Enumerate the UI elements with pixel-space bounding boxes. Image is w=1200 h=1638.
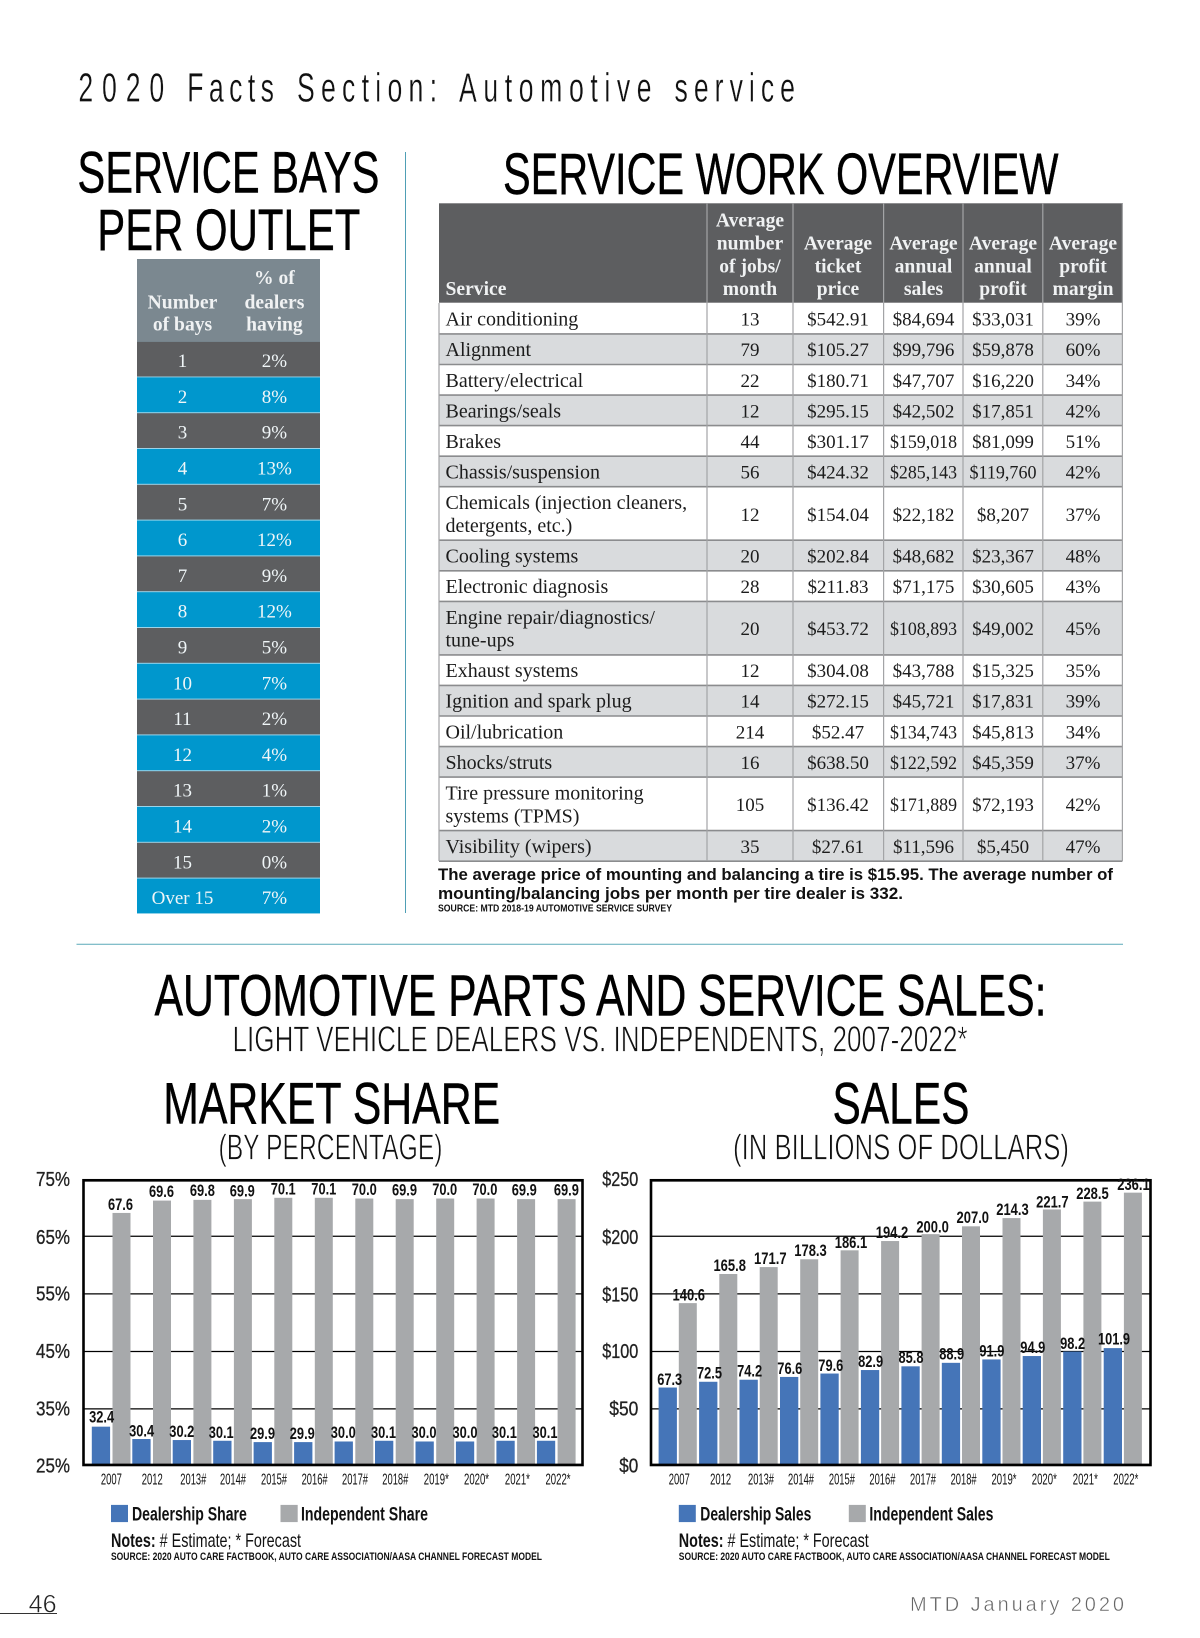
legend: Dealership Share [132, 1503, 247, 1524]
footer: publication and date: MTD January 2020 [910, 1594, 1124, 1616]
y axis labels: $150 [602, 1284, 638, 1307]
value labels: independent sales: 228.5 [1076, 1184, 1109, 1203]
table rows: $43,788 [893, 661, 954, 682]
value labels: independent sales [673, 1175, 1150, 1305]
table rows: Chemicals (injection cleaners, [446, 492, 687, 514]
table rows: 105 [736, 795, 764, 816]
table rows: Exhaust systems [446, 660, 578, 682]
legend: Dealership Sales [700, 1503, 811, 1524]
table header: number [717, 233, 783, 254]
value labels: dealership sales: 94.9 [1020, 1338, 1045, 1357]
table rows: 4 [178, 458, 188, 480]
table rows: $27.61 [812, 837, 864, 858]
table rows: 10 [173, 673, 192, 694]
table rows: $72,193 [972, 795, 1034, 816]
table rows: 28 [740, 577, 760, 598]
table rows: 12 [740, 401, 760, 422]
table rows: 6 [178, 530, 187, 551]
value labels: dealership share: 30.0 [453, 1423, 478, 1442]
table rows: $71,175 [893, 577, 954, 598]
table rows: 22 [740, 371, 760, 392]
table rows: $99,796 [893, 340, 954, 361]
table rows: 13 [173, 781, 192, 802]
panel: service work table [439, 203, 1122, 861]
legend: Independent Sales [869, 1503, 993, 1524]
table rows: $84,694 [893, 310, 955, 331]
table rows: Shocks/struts [446, 752, 552, 774]
table rows: Engine repair/diagnostics/ [446, 607, 655, 629]
table header: Average [889, 233, 958, 254]
value labels: dealership sales: 67.3 [657, 1370, 682, 1389]
table rows: $47,707 [893, 371, 954, 392]
table header [137, 259, 320, 342]
value labels: independent sales: 194.2 [876, 1223, 908, 1242]
value labels: independent sales: 140.6 [673, 1285, 705, 1305]
x axis labels: 2018# [382, 1471, 409, 1488]
table header: price [817, 279, 860, 300]
table rows: Cooling systems [446, 546, 579, 568]
value labels: dealership sales: 91.9 [979, 1341, 1004, 1360]
table rows: Electronic diagnosis [446, 576, 608, 598]
table rows: 12 [740, 505, 760, 526]
table rows: Brakes [446, 431, 501, 453]
table rows: $285,143 [890, 462, 957, 484]
table rows: 56 [740, 462, 760, 484]
x axis labels: 2016# [302, 1471, 328, 1488]
heading: service bays per outlet: PER OUTLET [97, 198, 360, 263]
y axis labels: $200 [602, 1227, 638, 1249]
table rows: $159,018 [890, 432, 957, 453]
bars: independent share [112, 1198, 576, 1464]
legend [111, 1503, 428, 1524]
table rows: Battery/electrical [446, 370, 584, 392]
table rows: Alignment [446, 339, 531, 361]
x axis labels [669, 1471, 1138, 1488]
y axis labels: 35% [36, 1399, 70, 1421]
value labels: independent share [108, 1179, 579, 1214]
bars: independent sales [679, 1193, 1142, 1464]
page number: 46 [29, 1590, 57, 1618]
value labels: independent share: 70.0 [352, 1180, 377, 1199]
table rows: $11,596 [893, 837, 954, 858]
table rows: $15,325 [972, 661, 1034, 682]
table header: margin [1053, 279, 1114, 300]
table rows: $45,813 [972, 722, 1034, 743]
table rows: Ignition and spark plug [446, 691, 632, 713]
table rows: 7% [262, 673, 287, 694]
table rows: Chassis/suspension [446, 462, 600, 484]
value labels: dealership sales: 79.6 [818, 1356, 843, 1375]
table rows: 51% [1066, 432, 1101, 453]
table rows: $211.83 [807, 577, 869, 598]
table rows [137, 342, 320, 913]
title [78, 66, 795, 111]
table header: profit [979, 279, 1027, 300]
value labels: independent sales: 200.0 [916, 1217, 949, 1237]
x axis labels: 2021* [505, 1471, 530, 1488]
table rows: 7% [262, 888, 287, 909]
table rows: 0% [262, 852, 287, 873]
table rows: 7 [178, 566, 187, 587]
value labels: independent share: 69.9 [554, 1181, 579, 1200]
table rows: $33,031 [972, 310, 1034, 331]
table rows: 39% [1066, 310, 1101, 331]
table rows: $154.04 [807, 505, 869, 526]
table rows: 44 [740, 432, 760, 453]
value labels: dealership share: 30.1 [492, 1423, 517, 1442]
value labels: dealership share: 29.9 [250, 1424, 275, 1443]
table rows: 13% [257, 458, 292, 480]
table header [439, 203, 1122, 303]
table rows: 12% [257, 602, 292, 623]
y axis labels: 65% [36, 1227, 70, 1249]
x axis labels: 2021* [1073, 1471, 1098, 1488]
value labels: dealership share: 30.1 [371, 1423, 396, 1442]
table header: of jobs/ [719, 257, 781, 278]
x axis labels: 2013# [748, 1471, 774, 1488]
value labels: independent share: 67.6 [108, 1195, 133, 1214]
page number [0, 1590, 57, 1618]
table rows: $30,605 [972, 577, 1034, 598]
note: mounting and balancing: mounting/balancing jobs per month per tire dealer is 332. [438, 885, 903, 903]
table rows: 14 [740, 692, 760, 713]
value labels: dealership share: 32.4 [89, 1407, 115, 1427]
table header: Average [716, 211, 784, 232]
value labels: dealership share: 30.4 [129, 1421, 155, 1440]
table rows: 2 [178, 387, 187, 408]
table rows: $105.27 [807, 340, 869, 361]
bars: dealership sales [659, 1348, 1122, 1464]
x axis labels: 2015# [829, 1471, 855, 1488]
value labels: dealership sales: 98.2 [1060, 1334, 1085, 1353]
table rows: systems (TPMS) [446, 805, 579, 827]
table rows: $5,450 [977, 837, 1029, 858]
value labels: independent sales: 221.7 [1036, 1192, 1069, 1211]
table header: annual [895, 257, 953, 278]
table rows: 20 [740, 546, 760, 568]
x axis labels: 2013# [180, 1471, 207, 1488]
table rows: 12% [257, 530, 292, 551]
subheading: in billions of dollars: (IN BILLIONS OF DOLLARS) [733, 1127, 1069, 1168]
value labels: independent share: 69.9 [392, 1181, 417, 1200]
table rows: $52.47 [812, 722, 864, 743]
table rows: 47% [1066, 837, 1101, 858]
table rows: 3 [178, 423, 187, 444]
value labels: independent sales: 178.3 [794, 1241, 827, 1260]
table rows: $49,002 [972, 619, 1034, 640]
table header: Average [969, 233, 1037, 254]
value labels: dealership share: 30.0 [331, 1423, 356, 1442]
table header: of bays [153, 315, 213, 336]
y axis labels: $100 [602, 1341, 638, 1363]
value labels: dealership sales: 82.9 [858, 1352, 883, 1371]
table header: annual [974, 257, 1032, 278]
heading: market share: MARKET SHARE [163, 1072, 500, 1136]
note: mounting and balancing: SOURCE: MTD 2018-19 AUTOMOTIVE SERVICE SURVEY [438, 902, 672, 914]
notes and source: Notes: # Estimate; * Forecast [679, 1530, 869, 1551]
bars: dealership share [92, 1427, 555, 1464]
x axis labels: 2020* [464, 1471, 489, 1488]
x axis labels: 2020* [1032, 1471, 1057, 1488]
title: Automotive [459, 66, 652, 111]
table rows: $23,367 [972, 546, 1034, 568]
table rows: $17,851 [972, 401, 1034, 422]
table rows: 34% [1066, 371, 1101, 392]
notes and source: Notes: # Estimate; * Forecast [111, 1530, 302, 1551]
table rows: 60% [1066, 340, 1101, 361]
table rows: 1% [262, 781, 287, 802]
table rows: $119,760 [970, 462, 1036, 484]
chart: sales bar chart [602, 1169, 1151, 1563]
table rows: $134,743 [890, 722, 957, 743]
x axis labels: 2014# [220, 1471, 246, 1488]
table rows: 7% [262, 494, 287, 515]
table rows: 16 [740, 753, 760, 774]
table rows: $48,682 [893, 546, 954, 568]
value labels: dealership share [89, 1407, 558, 1443]
table rows: 5% [262, 638, 287, 658]
table rows: $81,099 [972, 432, 1034, 453]
notes and source: SOURCE: 2020 AUTO CARE FACTBOOK, AUTO CARE ASSOCIATION/AASA CHANNEL FORECAST MODEL [111, 1551, 542, 1563]
table rows: 13 [740, 310, 760, 331]
table rows: $45,721 [893, 692, 954, 713]
table rows: 214 [736, 722, 765, 743]
table rows: 4% [262, 745, 287, 766]
value labels: independent share: 69.8 [190, 1181, 215, 1200]
table header: Number [148, 292, 218, 313]
y axis labels: 75% [36, 1169, 70, 1191]
table rows: Oil/lubrication [446, 721, 563, 743]
table rows: $180.71 [807, 371, 869, 392]
table rows: 1 [178, 351, 187, 372]
table rows: $171,889 [890, 795, 957, 816]
x axis labels: 2017# [910, 1471, 936, 1488]
panel: service bays table [137, 259, 320, 914]
table rows: 79 [740, 340, 760, 361]
table rows: 35 [740, 837, 760, 858]
table rows: 39% [1066, 692, 1101, 713]
table rows: 43% [1066, 577, 1101, 598]
table rows: tune-ups [446, 630, 515, 652]
table rows: $424.32 [807, 462, 869, 484]
y axis labels [602, 1169, 638, 1478]
table rows: $542.91 [807, 310, 869, 331]
table rows: 15 [173, 852, 192, 873]
table rows: 34% [1066, 722, 1101, 743]
table rows: 2% [262, 351, 287, 372]
table rows [446, 309, 1101, 858]
x axis labels: 2014# [788, 1471, 814, 1488]
table rows: 37% [1066, 753, 1101, 774]
x axis labels: 2019* [992, 1471, 1017, 1488]
table rows: 9% [262, 566, 287, 587]
value labels: independent share: 70.1 [271, 1179, 296, 1198]
table rows: $42,502 [893, 401, 954, 422]
table rows: $301.17 [807, 432, 869, 453]
table rows: Visibility (wipers) [446, 836, 592, 858]
value labels: dealership sales [657, 1329, 1130, 1389]
title: service [675, 66, 795, 111]
value labels: dealership sales: 72.5 [697, 1363, 722, 1383]
table rows: 2% [262, 816, 287, 838]
x axis labels: 2012 [710, 1471, 731, 1488]
table rows: Air conditioning [446, 309, 578, 331]
y axis labels: 55% [36, 1284, 70, 1306]
x axis labels: 2007 [101, 1471, 122, 1488]
value labels: independent sales: 165.8 [713, 1256, 746, 1275]
value labels: independent share: 70.0 [472, 1180, 497, 1199]
table rows: $304.08 [807, 661, 869, 682]
table rows: 2% [262, 709, 287, 730]
table rows: $122,592 [890, 753, 957, 774]
x axis labels: 2012 [142, 1471, 163, 1488]
value labels: independent share: 69.6 [149, 1182, 174, 1201]
table rows: $108,893 [890, 619, 957, 640]
y axis labels [36, 1169, 70, 1478]
table rows: 45% [1066, 619, 1101, 640]
table header: % of [254, 268, 295, 289]
table rows: 5 [178, 494, 187, 515]
x axis labels: 2017# [342, 1471, 368, 1488]
value labels: independent sales: 186.1 [835, 1233, 867, 1252]
value labels: dealership sales: 88.9 [939, 1345, 964, 1364]
value labels: independent share: 70.0 [432, 1180, 457, 1199]
table header: profit [1059, 257, 1107, 278]
table rows: $453.72 [807, 619, 869, 640]
table rows: 9 [178, 638, 187, 658]
table header: having [246, 315, 303, 336]
title: Section: [297, 66, 437, 111]
y axis labels: $50 [609, 1399, 638, 1421]
table rows: $272.15 [807, 692, 869, 713]
y axis labels: 25% [36, 1455, 70, 1478]
value labels: independent sales: 207.0 [957, 1208, 989, 1227]
value labels: dealership share: 30.1 [209, 1423, 234, 1442]
table rows: $136.42 [807, 795, 869, 816]
x axis labels: 2019* [424, 1471, 449, 1488]
table rows: Tire pressure monitoring [446, 783, 644, 805]
table rows: 37% [1066, 505, 1101, 526]
table rows: $8,207 [977, 505, 1029, 526]
title: 2020 [78, 66, 164, 111]
table rows: $59,878 [972, 340, 1034, 361]
table rows: 42% [1066, 462, 1101, 484]
x axis labels: 2015# [261, 1471, 287, 1488]
chart: market share bar chart [36, 1169, 583, 1563]
table rows: Bearings/seals [446, 400, 561, 422]
value labels: dealership sales: 76.6 [777, 1359, 802, 1378]
value labels: independent sales: 171.7 [754, 1249, 787, 1268]
table rows: 42% [1066, 401, 1101, 422]
value labels: dealership sales: 101.9 [1098, 1329, 1130, 1349]
table rows: Over 15 [152, 888, 213, 909]
value labels: independent share: 70.1 [311, 1179, 336, 1198]
table rows: 35% [1066, 661, 1101, 682]
table rows: $45,359 [972, 753, 1034, 774]
value labels: independent share: 69.9 [230, 1181, 255, 1201]
notes and source: SOURCE: 2020 AUTO CARE FACTBOOK, AUTO CARE ASSOCIATION/AASA CHANNEL FORECAST MODEL [679, 1551, 1110, 1563]
legend: Independent Share [301, 1503, 428, 1524]
table rows: $295.15 [807, 401, 869, 422]
value labels: dealership share: 30.2 [169, 1422, 194, 1441]
value labels: dealership share: 30.1 [532, 1423, 557, 1442]
x axis labels: 2022* [1113, 1471, 1138, 1488]
table rows: $17,831 [972, 692, 1034, 713]
heading: service bays per outlet: SERVICE BAYS [77, 141, 379, 206]
table rows: 14 [173, 816, 192, 838]
table rows: 48% [1066, 546, 1101, 568]
value labels: dealership sales: 85.8 [898, 1348, 923, 1367]
x axis labels [101, 1471, 571, 1488]
y axis labels: $0 [619, 1455, 638, 1478]
table rows: 8% [262, 387, 287, 408]
title: Facts [187, 66, 274, 111]
value labels: independent share: 69.9 [512, 1181, 537, 1200]
x axis labels: 2016# [869, 1471, 896, 1488]
table header: Average [804, 233, 872, 254]
x axis labels: 2007 [669, 1471, 690, 1488]
table header: Service [446, 279, 507, 300]
table rows: 9% [262, 423, 287, 444]
table rows: $16,220 [972, 371, 1034, 392]
table rows: 12 [173, 745, 192, 766]
value labels: dealership share: 30.0 [411, 1423, 436, 1442]
table rows: 42% [1066, 795, 1101, 816]
table rows: $638.50 [807, 753, 869, 774]
y axis labels: $250 [602, 1169, 638, 1191]
heading: service bays per outlet [77, 141, 379, 263]
value labels: independent sales: 236.1 [1117, 1175, 1150, 1194]
y axis labels: 45% [36, 1341, 70, 1363]
table header: sales [904, 279, 943, 300]
table rows: 12 [740, 661, 760, 682]
note: mounting and balancing: The average price of mounting and balancing a tire is $15.95. The average number of [438, 866, 1114, 884]
table header: month [723, 279, 777, 300]
table header: dealers [244, 292, 305, 313]
table rows: 11 [173, 709, 192, 730]
notes and source [111, 1530, 542, 1563]
table header: Average [1049, 233, 1117, 254]
value labels: independent sales: 214.3 [996, 1200, 1029, 1219]
table header: ticket [815, 257, 862, 278]
value labels: dealership share: 29.9 [290, 1424, 315, 1443]
notes and source [679, 1530, 1110, 1563]
table rows: detergents, etc.) [446, 515, 572, 537]
x axis labels: 2018# [951, 1471, 977, 1488]
subheading: by percentage: (BY PERCENTAGE) [218, 1127, 442, 1168]
note: mounting and balancing [438, 866, 1114, 914]
table rows: $22,182 [893, 505, 954, 526]
table rows: $202.84 [807, 546, 869, 568]
value labels: dealership sales: 74.2 [737, 1361, 762, 1381]
heading: sales: SALES [832, 1072, 970, 1136]
x axis labels: 2022* [545, 1471, 571, 1488]
legend [679, 1503, 993, 1524]
table rows: 8 [178, 602, 187, 623]
table rows: 20 [740, 619, 760, 640]
